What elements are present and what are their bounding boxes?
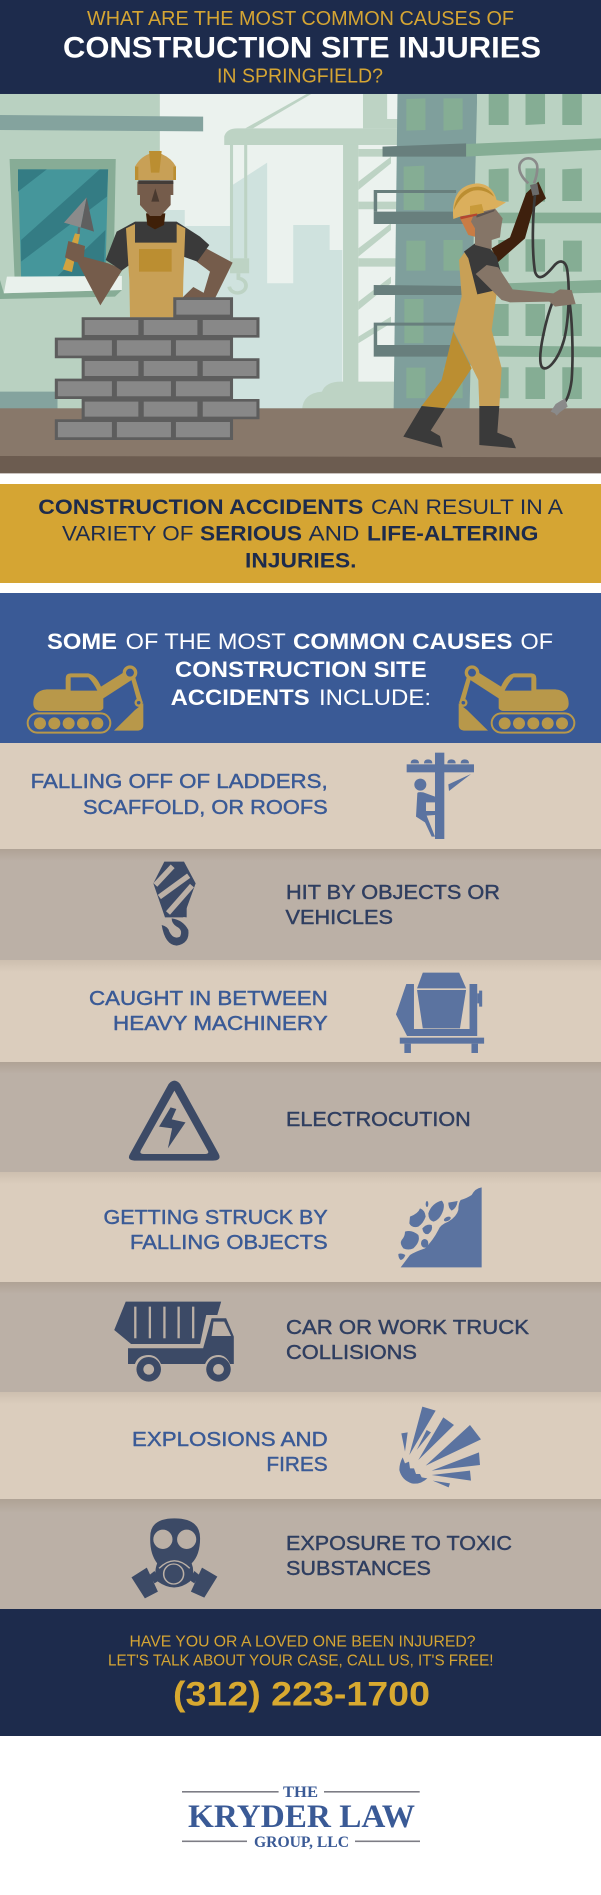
cause 2 text: VEHICLES xyxy=(286,906,393,929)
cause 5 text: FALLING OBJECTS xyxy=(130,1231,328,1254)
causes heading text: OF THE MOST xyxy=(126,629,286,654)
cause 6 text: CAR OR WORK TRUCK xyxy=(286,1316,529,1339)
cause 3 text xyxy=(89,987,328,1035)
statement text: VARIETY OF xyxy=(62,522,194,546)
icon: excavator right xyxy=(459,667,574,733)
panel: cause 1 falling xyxy=(0,743,601,849)
statement text: LIFE-ALTERING xyxy=(367,522,538,546)
electrician worker with cord xyxy=(403,158,576,448)
cause 2 text xyxy=(286,881,500,929)
icon: utility pole climber xyxy=(407,753,474,839)
statement text: AND xyxy=(308,522,360,546)
icon: cement mixer xyxy=(396,973,484,1053)
call to action text: HAVE YOU OR A LOVED ONE BEEN INJURED? xyxy=(130,1634,476,1650)
panel: call to action footer xyxy=(0,1609,601,1736)
logo: The Kryder Law Group: KRYDER LAW xyxy=(188,1799,415,1835)
cause 1 text: FALLING OFF OF LADDERS, xyxy=(31,770,328,793)
heading main title: CONSTRUCTION SITE INJURIES xyxy=(63,32,541,64)
heading line 3: IN SPRINGFIELD? xyxy=(217,66,383,88)
panel: cause 2 hit by objects xyxy=(0,849,601,960)
panel: cause 7 explosions xyxy=(0,1392,601,1499)
cause 8 text: SUBSTANCES xyxy=(286,1557,431,1580)
panel: cause 4 electrocution xyxy=(0,1062,601,1172)
statement text: CAN RESULT IN A xyxy=(371,496,563,519)
icon: dump truck xyxy=(114,1302,234,1382)
causes heading text: SOME xyxy=(47,629,117,654)
call to action text line 2: LET'S TALK ABOUT YOUR CASE, CALL US, IT'S FREE! xyxy=(108,1652,494,1670)
panel: cause 5 falling objects xyxy=(0,1172,601,1282)
panel: causes heading xyxy=(0,593,601,743)
cause 2 text: HIT BY OBJECTS OR xyxy=(286,881,500,904)
panel: cause 8 toxic substances xyxy=(0,1499,601,1609)
icon: explosion xyxy=(399,1407,481,1487)
causes heading text: COMMON CAUSES xyxy=(293,629,512,654)
logo: The Kryder Law Group xyxy=(182,1784,420,1851)
heading line 1: WHAT ARE THE MOST COMMON CAUSES OF xyxy=(87,8,514,30)
cause 6 text xyxy=(286,1316,529,1364)
cause 7 text: EXPLOSIONS AND xyxy=(132,1428,328,1451)
cause 1 text: SCAFFOLD, OR ROOFS xyxy=(83,796,328,819)
phone number: (312) 223-1700 xyxy=(173,1676,430,1714)
cause 4 text: ELECTROCUTION xyxy=(286,1108,471,1131)
cause 7 text xyxy=(132,1428,328,1476)
causes heading text: ACCIDENTS xyxy=(171,685,310,710)
panel: cause 3 caught in machinery xyxy=(0,960,601,1062)
brick wall xyxy=(55,297,259,440)
bricklayer worker xyxy=(63,151,233,317)
causes heading text xyxy=(47,629,553,710)
cause 8 text: EXPOSURE TO TOXIC xyxy=(286,1532,512,1555)
cause 8 text xyxy=(286,1532,512,1580)
cause 6 text: COLLISIONS xyxy=(286,1341,417,1364)
panel: cause 6 truck collisions xyxy=(0,1282,601,1392)
causes heading text: INCLUDE: xyxy=(319,685,431,710)
logo: The Kryder Law Group: GROUP, LLC xyxy=(254,1834,349,1851)
icon: falling rocks xyxy=(398,1187,482,1267)
statement text xyxy=(38,496,563,572)
cause 1 text xyxy=(31,770,328,819)
illustration: construction site xyxy=(0,94,601,473)
panel: header xyxy=(0,0,601,94)
cause 7 text: FIRES xyxy=(266,1453,328,1476)
icon: electric hazard triangle xyxy=(129,1081,220,1161)
background buildings and crane xyxy=(0,94,601,473)
cause 3 text: HEAVY MACHINERY xyxy=(113,1012,328,1035)
statement text: INJURIES. xyxy=(245,550,356,572)
cause 5 text xyxy=(104,1206,328,1254)
icon: crane hook xyxy=(153,862,196,946)
cause 3 text: CAUGHT IN BETWEEN xyxy=(89,987,328,1010)
statement text: SERIOUS xyxy=(200,522,302,546)
statement text: CONSTRUCTION ACCIDENTS xyxy=(38,496,363,519)
panel: gold statement band xyxy=(0,484,601,583)
causes heading text: CONSTRUCTION SITE xyxy=(175,657,427,682)
causes heading text: OF xyxy=(520,629,553,654)
icon: gas mask xyxy=(131,1518,217,1598)
logo: The Kryder Law Group: THE xyxy=(283,1784,318,1801)
icon: excavator left xyxy=(28,667,143,733)
cause 5 text: GETTING STRUCK BY xyxy=(104,1206,328,1229)
